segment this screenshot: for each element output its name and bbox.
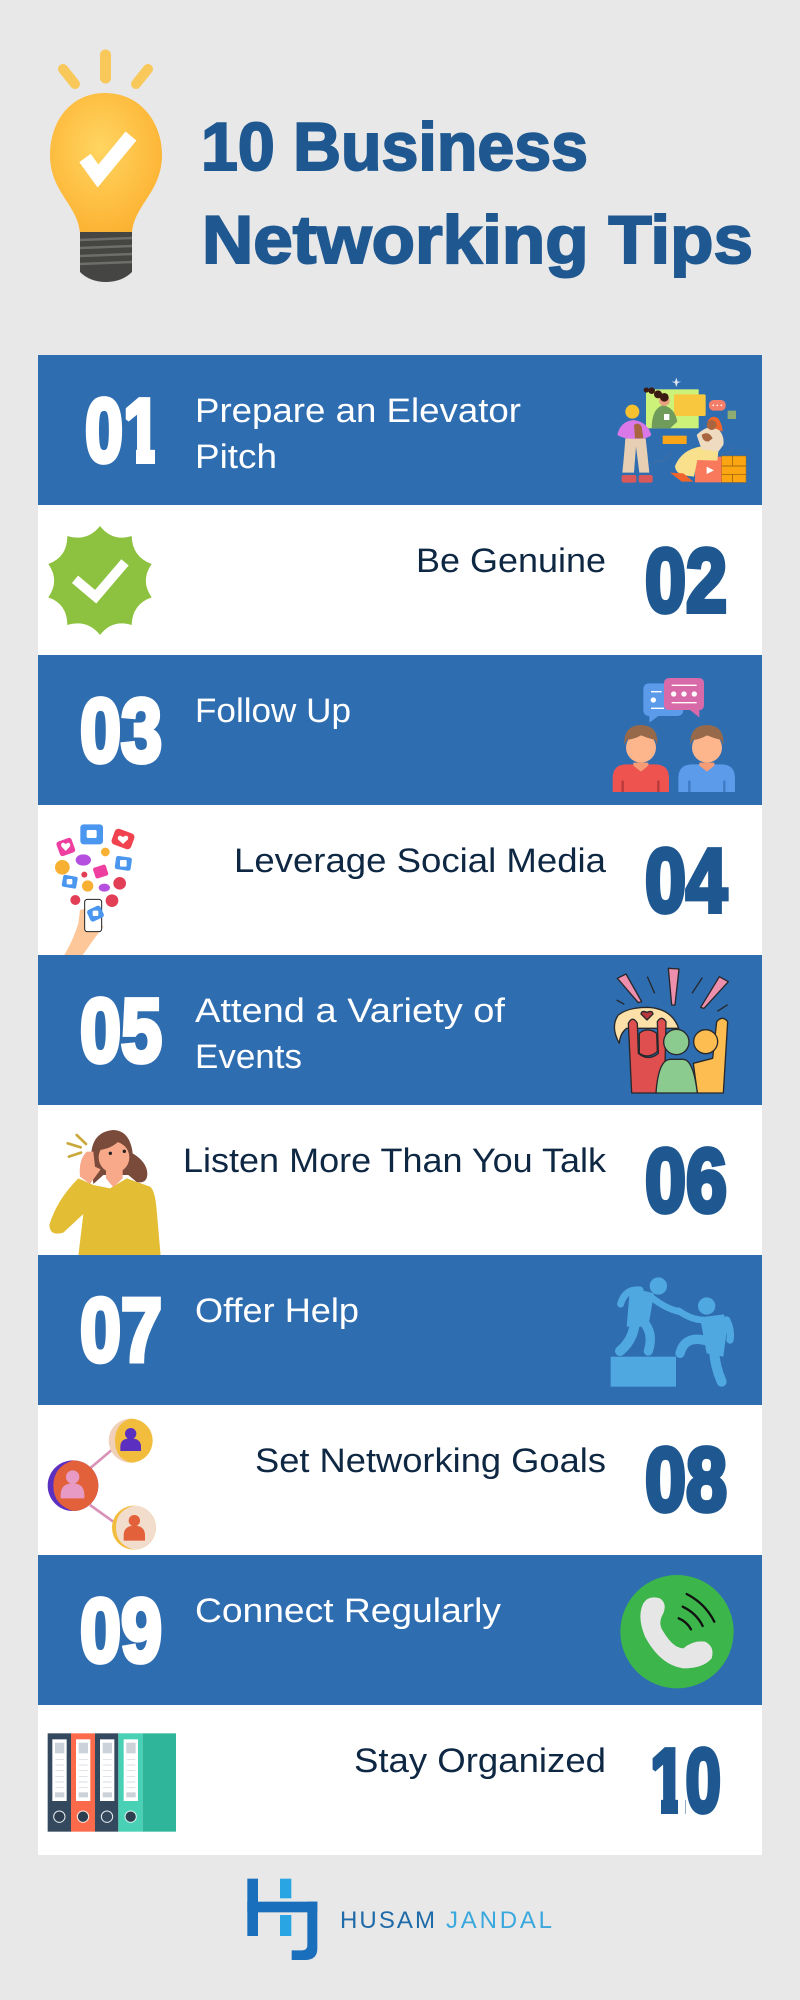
number 04: 04 — [645, 832, 727, 932]
tip text 07: Offer Help — [195, 1292, 359, 1330]
panel: tip 08 — [38, 1405, 762, 1555]
panel: tip 05 — [38, 955, 762, 1105]
logo wordmark: JANDAL — [446, 1907, 552, 1934]
panel: tip 07 — [38, 1255, 762, 1405]
number 07: 07 — [80, 1281, 162, 1381]
icon: green phone call — [620, 1575, 734, 1688]
panel: tip 02 — [38, 505, 762, 655]
number 10: 10 — [650, 1732, 721, 1832]
tip text 06: Listen More Than You Talk — [183, 1142, 607, 1180]
number 09: 09 — [80, 1582, 162, 1682]
number 01: 01 — [85, 382, 161, 482]
tip text 01: Pitch — [195, 438, 277, 476]
tip text 10: Stay Organized — [354, 1742, 606, 1780]
panel: tip 03 — [38, 655, 762, 805]
icon: crowd cheering at an event — [614, 968, 728, 1093]
tip text 09: Connect Regularly — [195, 1592, 501, 1630]
panel: tip 06 — [38, 1105, 762, 1256]
title: 10 Business — [201, 109, 588, 185]
tip text 05: Attend a Variety of — [195, 992, 506, 1030]
logo mark — [247, 1879, 317, 1960]
icon: row of binders — [48, 1733, 176, 1832]
number 08: 08 — [645, 1430, 727, 1530]
panel: tip 09 — [38, 1555, 762, 1705]
tip text 03: Follow Up — [195, 692, 351, 730]
title — [201, 109, 753, 278]
tip text 05 — [195, 992, 506, 1076]
panel: tip 01 — [38, 355, 762, 505]
tip text 01 — [195, 392, 521, 476]
logo: Husam Jandal — [247, 1879, 552, 1960]
tip text 01: Prepare an Elevator — [195, 392, 521, 430]
icon: woman listening with hand at ear — [49, 1130, 161, 1256]
number 05: 05 — [80, 982, 162, 1082]
tip text 04: Leverage Social Media — [234, 842, 606, 880]
icon: network of connected people — [48, 1419, 156, 1550]
tip text 05: Events — [195, 1038, 302, 1076]
panel: tip 04 — [38, 805, 762, 957]
icon: green check badge — [48, 526, 152, 635]
title: Networking Tips — [202, 202, 753, 278]
panel: tip 10 — [38, 1705, 762, 1855]
icon: person helping another up a step — [611, 1277, 730, 1387]
logo wordmark: HUSAM — [340, 1907, 435, 1934]
icon: light bulb with check mark — [50, 55, 162, 282]
logo wordmark — [340, 1907, 552, 1934]
icon: team people with screen — [617, 378, 746, 483]
icon: hand holding phone with social reactions — [55, 824, 136, 957]
number 03: 03 — [80, 682, 162, 782]
number 06: 06 — [645, 1132, 727, 1232]
number 02: 02 — [645, 532, 727, 632]
icon: two people chatting — [613, 678, 735, 792]
tip text 02: Be Genuine — [416, 542, 606, 580]
tip text 08: Set Networking Goals — [255, 1442, 606, 1480]
